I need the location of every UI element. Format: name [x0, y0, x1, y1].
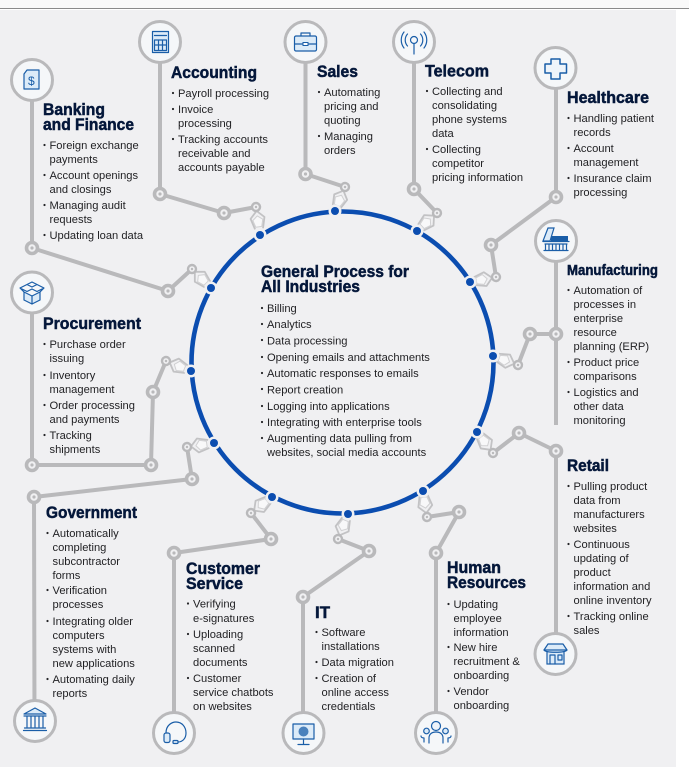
- list: customer service: service chatbots: [193, 687, 274, 699]
- list: government: computers: [52, 630, 105, 642]
- heading: general process: General Process for: [261, 262, 409, 281]
- list: banking: Account openings: [50, 170, 138, 182]
- connector: customer service: [168, 493, 276, 733]
- panel: human resources: [416, 487, 526, 754]
- list: healthcare: Handling patient: [574, 113, 655, 125]
- list: healthcare: management: [574, 157, 639, 169]
- list: banking: Managing audit: [50, 200, 127, 212]
- list: healthcare: [567, 113, 655, 199]
- list: manufacturing: planning (ERP): [574, 341, 649, 353]
- panel: telecom: [394, 22, 523, 235]
- list: human resources: recruitment &: [454, 656, 520, 668]
- connector: procurement: [26, 293, 195, 470]
- list: general process: Billing: [267, 303, 297, 315]
- list: sales: [318, 87, 380, 157]
- list: manufacturing: monitoring: [574, 415, 626, 427]
- list: sales: Managing: [324, 131, 373, 143]
- list: IT: Data migration: [322, 657, 394, 669]
- list: IT: credentials: [322, 701, 376, 713]
- heading: accounting: Accounting: [171, 63, 257, 82]
- list: manufacturing: comparisons: [574, 371, 637, 383]
- list: customer service: on websites: [193, 701, 252, 713]
- list: government: systems with: [52, 644, 116, 656]
- panel: customer service: [154, 493, 276, 754]
- list: accounting: receivable and: [178, 148, 250, 160]
- heading: telecom: Telecom: [425, 62, 489, 80]
- panel: healthcare: [466, 48, 655, 288]
- list: general process: Opening emails and attachments: [267, 352, 430, 364]
- heading: customer service: [186, 559, 260, 593]
- heading: healthcare: Healthcare: [567, 88, 649, 107]
- list: customer service: Uploading: [193, 629, 243, 641]
- connector: manufacturing: [489, 241, 562, 425]
- icon: dollar document: $: [28, 74, 35, 88]
- central ring: [192, 212, 494, 514]
- list: general process: [261, 303, 430, 459]
- heading: human resources: [447, 558, 526, 592]
- list: procurement: management: [50, 384, 115, 396]
- list: procurement: issuing: [50, 353, 84, 365]
- list: general process: Integrating with enterprise tools: [267, 417, 422, 429]
- list: retail: Pulling product: [574, 481, 648, 493]
- list: government: reports: [52, 688, 88, 700]
- list: accounting: Tracking accounts: [178, 134, 268, 146]
- heading: human resources: Human: [447, 558, 501, 577]
- icon: people: [416, 712, 456, 754]
- heading: procurement: Procurement: [43, 314, 141, 333]
- list: government: Integrating older: [52, 616, 133, 628]
- list: human resources: Vendor: [454, 686, 489, 698]
- heading: banking: Banking: [43, 100, 105, 119]
- list: telecom: competitor: [432, 158, 484, 170]
- panel: accounting: [140, 22, 269, 239]
- list: telecom: consolidating: [432, 100, 497, 112]
- list: human resources: employee: [454, 613, 502, 625]
- list: retail: product: [574, 567, 612, 579]
- list: sales: Automating: [324, 87, 380, 99]
- list: general process: Logging into applications: [267, 401, 390, 413]
- list: retail: information and: [574, 581, 650, 593]
- list: procurement: and payments: [50, 414, 120, 426]
- list: government: processes: [52, 599, 104, 611]
- list: accounting: accounts payable: [178, 162, 265, 174]
- list: government: new applications: [52, 658, 135, 670]
- list: human resources: onboarding: [454, 700, 509, 712]
- list: sales: quoting: [324, 115, 361, 127]
- list: general process: websites, social media accounts: [266, 447, 427, 459]
- heading: human resources: Resources: [447, 573, 526, 592]
- list: procurement: Inventory: [50, 370, 96, 382]
- connector: government: [28, 437, 218, 721]
- list: telecom: Collecting: [432, 144, 481, 156]
- list: IT: online access: [322, 687, 389, 699]
- list: manufacturing: Logistics and: [574, 387, 639, 399]
- list: general process: Augmenting data pulling from: [267, 433, 412, 445]
- list: general process: Data processing: [267, 336, 348, 348]
- icon: storefront: [535, 634, 576, 674]
- list: human resources: [447, 599, 520, 712]
- heading: IT: IT: [315, 603, 331, 622]
- icon: headset: [154, 712, 194, 754]
- list: procurement: Order processing: [50, 400, 135, 412]
- list: retail: data from: [574, 495, 621, 507]
- list: government: Automating daily: [52, 674, 135, 686]
- list: government: [46, 528, 135, 700]
- icon: factory: [536, 220, 576, 262]
- list: telecom: phone systems: [432, 114, 507, 126]
- list: human resources: onboarding: [454, 670, 509, 682]
- list: general process: Automatic responses to emails: [267, 368, 419, 380]
- icon: medical cross: [535, 48, 576, 88]
- list: retail: Continuous: [574, 539, 630, 551]
- list: retail: updating of: [574, 553, 630, 565]
- list: manufacturing: [567, 285, 649, 427]
- panel: general process: [261, 262, 430, 459]
- list: healthcare: Account: [574, 143, 615, 155]
- list: banking: requests: [50, 214, 93, 226]
- list: banking: and closings: [50, 184, 112, 196]
- list: banking: Updating loan data: [50, 230, 144, 242]
- connector: healthcare: [466, 68, 562, 288]
- connector: telecom: [408, 42, 445, 235]
- list: healthcare: records: [574, 127, 611, 139]
- heading: customer service: Service: [186, 574, 243, 593]
- list: manufacturing: Product price: [574, 357, 639, 369]
- list: procurement: Tracking: [50, 430, 92, 442]
- list: manufacturing: processes in: [574, 299, 636, 311]
- list: retail: manufacturers: [574, 509, 645, 521]
- list: telecom: Collecting and: [432, 86, 503, 98]
- icon: government building: [14, 700, 56, 742]
- list: telecom: pricing information: [432, 172, 523, 184]
- icon: dollar document: [12, 60, 52, 100]
- list: human resources: information: [454, 627, 509, 639]
- list: IT: installations: [322, 641, 380, 653]
- list: general process: Analytics: [267, 319, 312, 331]
- list: government: forms: [52, 570, 81, 582]
- list: retail: [567, 481, 652, 637]
- panel: sales: [285, 22, 380, 215]
- list: banking: payments: [50, 154, 98, 166]
- icon: open box: [12, 272, 52, 313]
- list: accounting: Invoice: [178, 104, 213, 116]
- list: retail: sales: [574, 625, 600, 637]
- panel: retail: [473, 428, 652, 674]
- panel: government: [14, 437, 218, 742]
- list: accounting: processing: [178, 118, 232, 130]
- list: customer service: Customer: [193, 673, 242, 685]
- connector: banking: [26, 80, 215, 296]
- list: retail: online inventory: [574, 595, 652, 607]
- list: IT: Creation of: [322, 673, 377, 685]
- list: manufacturing: other data: [574, 401, 624, 413]
- list: accounting: Payroll processing: [178, 88, 269, 100]
- list: human resources: Updating: [454, 599, 498, 611]
- panel: manufacturing: [489, 220, 658, 427]
- list: government: Automatically: [52, 528, 119, 540]
- connector: accounting: [154, 42, 266, 239]
- list: banking: Foreign exchange: [50, 140, 139, 152]
- icon: monitor: [283, 712, 324, 754]
- list: customer service: [187, 598, 274, 713]
- list: government: Verification: [52, 585, 107, 597]
- icon: briefcase: [285, 22, 326, 62]
- icon: antenna: [394, 22, 434, 62]
- icon: calculator: [140, 22, 180, 62]
- list: retail: websites: [572, 523, 617, 535]
- list: government: subcontractor: [52, 556, 120, 568]
- list: accounting: [172, 88, 269, 174]
- heading: customer service: Customer: [186, 559, 260, 578]
- connector: sales: [300, 42, 353, 215]
- list: healthcare: processing: [574, 187, 627, 199]
- list: procurement: Purchase order: [50, 339, 126, 351]
- panel: procurement: [12, 272, 195, 470]
- list: telecom: [426, 86, 523, 184]
- connector: human resources: [417, 487, 464, 733]
- connector: retail: [473, 428, 562, 654]
- list: retail: Tracking online: [574, 611, 649, 623]
- list: sales: pricing and: [324, 101, 379, 113]
- list: customer service: e-signatures: [193, 613, 255, 625]
- panel: banking and finance: [12, 60, 215, 296]
- heading: general process: [261, 262, 409, 296]
- heading: sales: Sales: [317, 62, 358, 81]
- list: manufacturing: enterprise: [574, 313, 623, 325]
- list: IT: Software: [322, 627, 365, 639]
- list: procurement: shipments: [50, 444, 101, 456]
- list: telecom: data: [432, 128, 454, 140]
- heading: banking: [43, 100, 134, 134]
- list: sales: orders: [324, 145, 356, 157]
- list: general process: Report creation: [267, 384, 343, 396]
- list: government: completing: [52, 542, 106, 554]
- list: procurement: [43, 339, 135, 456]
- heading: government: Government: [46, 503, 137, 522]
- list: manufacturing: resource: [574, 327, 617, 339]
- heading: general process: All Industries: [261, 277, 360, 296]
- connector: IT: [298, 510, 374, 733]
- list: manufacturing: Automation of: [574, 285, 643, 297]
- list: customer service: scanned: [193, 643, 235, 655]
- heading: manufacturing: Manufacturing: [567, 262, 658, 279]
- panel: IT: [283, 510, 394, 754]
- list: human resources: New hire: [454, 642, 497, 654]
- heading: retail: Retail: [567, 456, 609, 475]
- list: IT: [315, 627, 394, 713]
- heading: banking: and Finance: [43, 115, 134, 134]
- list: customer service: Verifying: [193, 598, 236, 610]
- list: healthcare: Insurance claim: [574, 173, 652, 185]
- list: banking: [43, 140, 144, 242]
- list: customer service: documents: [193, 657, 248, 669]
